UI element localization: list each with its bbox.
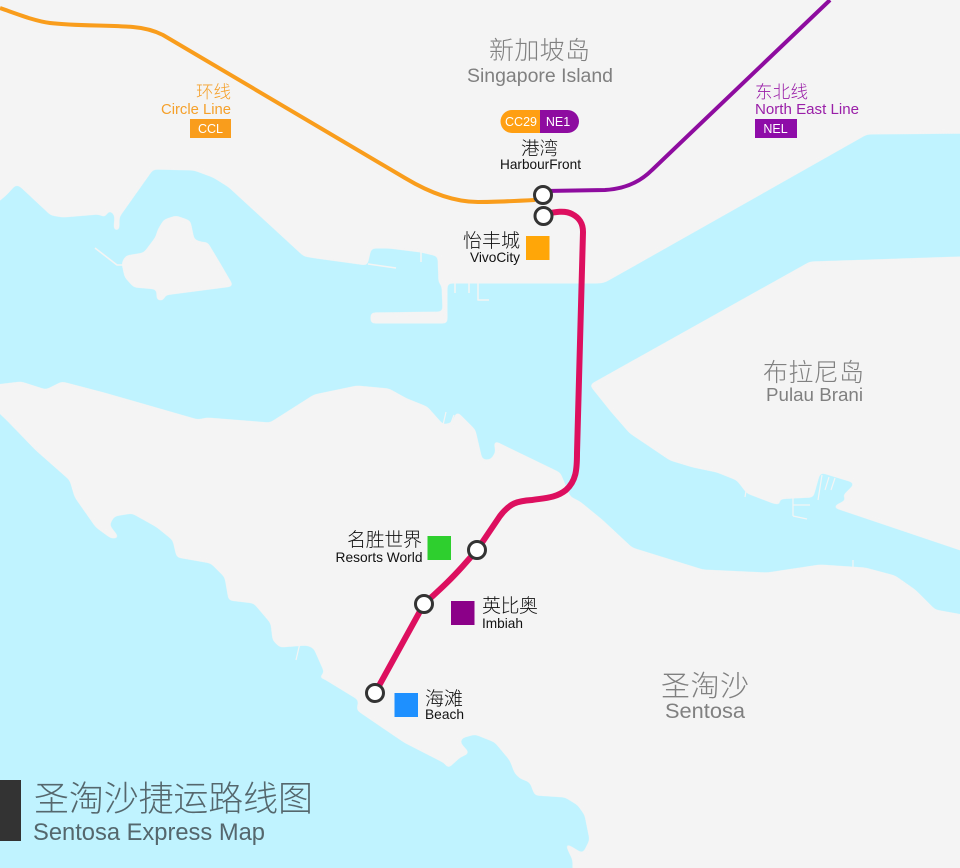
- label: Singapore Island: 新加坡岛: [489, 37, 590, 65]
- line: Sentosa Express: [375, 212, 583, 693]
- station: HarbourFront Sentosa Express platform: [535, 208, 552, 224]
- station code pill: CC29 NE1: [500, 110, 579, 133]
- title marker bar: [0, 780, 21, 841]
- icon: VivoCity square: [526, 236, 550, 260]
- label: Resorts World: 名胜世界: [347, 529, 422, 551]
- label: Resorts World: [336, 529, 422, 565]
- label: Sentosa: [661, 670, 749, 723]
- label: Sentosa: Sentosa: [665, 700, 745, 723]
- legend: Circle Line: CCL: [198, 122, 223, 136]
- label: VivoCity: [463, 230, 520, 265]
- label: VivoCity: VivoCity: [470, 249, 520, 265]
- label: Beach: 海滩: [425, 688, 463, 710]
- legend: North East Line: [755, 82, 859, 138]
- label: Imbiah: 英比奥: [482, 595, 538, 617]
- label: VivoCity: 怡丰城: [463, 230, 520, 252]
- line: Circle Line: [0, 8, 535, 202]
- title: 圣淘沙捷运路线图: [34, 780, 313, 819]
- station: HarbourFront North East and Circle platform: [534, 186, 552, 204]
- label: Imbiah: Imbiah: [482, 615, 523, 631]
- label: Beach: [425, 688, 464, 722]
- land: Pulau Brani: [590, 256, 960, 560]
- icon: Resorts World square: [428, 536, 451, 560]
- line: North East Line: [545, 0, 830, 191]
- label: Sentosa: 圣淘沙: [661, 670, 749, 703]
- land: small island: [95, 216, 233, 300]
- label: Singapore Island: Singapore Island: [467, 66, 613, 87]
- land: Singapore Island: [0, 0, 960, 323]
- legend: Circle Line: Circle Line: [161, 101, 231, 118]
- station code pill: CC29 NE1: CC29: [505, 115, 537, 129]
- label: Singapore Island: [467, 37, 613, 87]
- legend: North East Line: North East Line: [755, 101, 859, 118]
- label: Resorts World: Resorts World: [336, 549, 422, 565]
- icon: Beach square: [394, 693, 418, 717]
- label: Pulau Brani: [763, 359, 864, 405]
- title: [33, 780, 313, 846]
- station code pill: CC29 NE1: NE1: [546, 115, 570, 129]
- label: Pulau Brani: Pulau Brani: [766, 385, 863, 405]
- label: Beach: Beach: [425, 706, 464, 722]
- label: Imbiah: [482, 595, 538, 631]
- label: HarbourFront: 港湾: [521, 138, 558, 159]
- station: Imbiah: [416, 596, 432, 612]
- station: Beach: [366, 684, 384, 702]
- legend: North East Line: 东北线: [755, 82, 808, 102]
- station: Resorts World: [468, 542, 486, 558]
- label: Pulau Brani: 布拉尼岛: [763, 359, 864, 387]
- title: Sentosa Express Map: [33, 819, 265, 846]
- legend: Circle Line: 环线: [196, 82, 231, 102]
- label: HarbourFront: HarbourFront: [500, 156, 581, 172]
- land: Sentosa: [0, 382, 960, 868]
- label: HarbourFront: [500, 138, 581, 172]
- legend: Circle Line: [161, 82, 231, 138]
- icon: Imbiah square: [451, 601, 474, 625]
- legend: North East Line: NEL: [763, 122, 788, 136]
